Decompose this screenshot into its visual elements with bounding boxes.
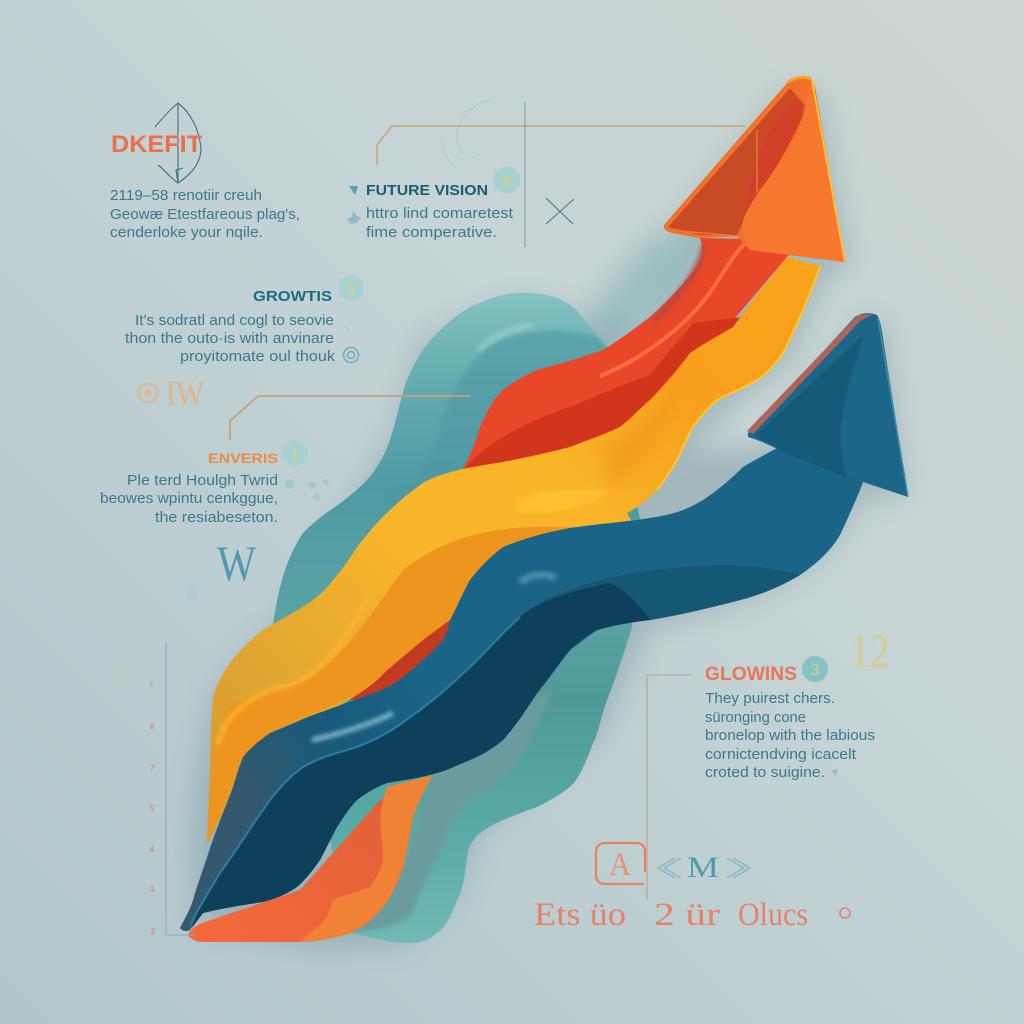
blue ribbon	[180, 448, 863, 931]
yellow ribbon orange lower band	[208, 527, 620, 838]
red sliver	[350, 590, 480, 700]
red ribbon light stripe	[600, 238, 752, 376]
left axis: 5	[150, 804, 155, 813]
left axis: 2	[151, 927, 156, 936]
body text: süronging cone	[705, 710, 806, 726]
body text: croted to suigine.	[705, 765, 825, 781]
yellow ribbon bright stripe	[218, 600, 368, 745]
badge	[282, 440, 308, 466]
label: IW	[138, 374, 204, 413]
blue arrow head	[747, 313, 908, 497]
leader line	[647, 675, 692, 900]
left axis: 1	[118, 671, 124, 681]
icon: leaf outline	[155, 103, 201, 183]
head base	[664, 77, 845, 262]
ribbon arrow illustration	[180, 77, 908, 950]
blue ribbon highlight	[312, 713, 393, 740]
drop shadow	[193, 90, 905, 950]
body text	[366, 206, 513, 241]
teal grey band	[350, 687, 553, 933]
number 12: 12	[850, 625, 890, 678]
left axis	[112, 642, 195, 936]
body text: cenderloke your nqile.	[110, 225, 263, 241]
body text	[110, 188, 300, 241]
footer text: Ets üo	[534, 897, 626, 933]
badge: 6	[503, 173, 511, 190]
block: glowins	[647, 625, 890, 900]
yellow ribbon rim	[657, 266, 820, 490]
label: IW: IW	[166, 374, 204, 413]
blue ribbon stripe	[190, 617, 520, 925]
left axis: 4	[150, 845, 155, 854]
heading: GROWTIS	[253, 288, 332, 305]
body text: It's sodratl and cogl to seovie	[135, 313, 334, 329]
blue ribbon dark lower	[192, 583, 650, 928]
head red blob	[743, 101, 803, 217]
body text: fime comperative.	[366, 225, 497, 241]
head left rim	[667, 85, 790, 236]
head rim	[747, 314, 874, 434]
head fold line	[756, 130, 758, 193]
icon: left chevrons	[658, 858, 681, 878]
orange tail light band	[300, 775, 433, 942]
body text: Geowæ Etestfareous plag's,	[110, 207, 300, 223]
top connector line	[377, 126, 745, 165]
heading: GLOWINS	[705, 664, 797, 685]
body text	[100, 473, 278, 526]
yellow ribbon shade	[600, 390, 680, 490]
left axis: c	[150, 679, 154, 688]
body text: beowes wpintu cenkggue,	[100, 491, 278, 507]
icon: ring	[344, 348, 358, 362]
teal wave	[273, 293, 640, 943]
vertical divider	[524, 102, 526, 247]
badge	[494, 166, 520, 194]
head yellow rim	[812, 80, 845, 262]
body text	[125, 313, 336, 365]
red ribbon shaded rim	[655, 245, 704, 320]
icon: small drop	[832, 770, 838, 776]
icon: M: M	[687, 851, 719, 884]
block: future vision	[347, 100, 574, 247]
icon: cross	[546, 198, 574, 224]
body text: Ple terd Houlgh Twrid	[127, 473, 278, 489]
body text: thon the outo·is with anvinare	[125, 331, 334, 347]
icon: small mark	[343, 322, 351, 330]
body text: 2119–58 renotiir creuh	[110, 188, 262, 204]
teal shadow under red ribbon	[590, 235, 705, 350]
footer text: Olucs	[738, 897, 808, 933]
red ribbon dark lower	[465, 290, 760, 468]
heading: FUTURE VISION	[366, 182, 488, 199]
body text: the resiabeseton.	[155, 510, 278, 526]
body text: httro lind comaretest	[366, 206, 513, 222]
badge	[338, 275, 364, 301]
teal inner shade	[380, 330, 610, 510]
yellow ribbon	[207, 257, 820, 845]
body text	[705, 691, 875, 781]
icon: boxed A	[596, 843, 645, 884]
orange tail	[188, 775, 433, 942]
left axis: 3	[150, 885, 155, 894]
block: title DKEFIT	[110, 103, 300, 241]
connector line to ribbon	[230, 396, 470, 440]
body text: bronelop with the labious	[705, 728, 875, 744]
body text: cornictendving icacelt	[705, 747, 856, 763]
head body	[748, 313, 908, 497]
teal highlight	[478, 325, 533, 350]
icon: small heart	[349, 186, 358, 195]
blue ribbon mid shade	[470, 565, 800, 700]
block: growth	[125, 275, 364, 365]
decorative dots	[285, 479, 329, 501]
head right face	[742, 82, 845, 262]
icon: right chevrons	[727, 858, 750, 878]
yellow ribbon bright ridge	[517, 490, 610, 513]
head left face	[668, 88, 805, 235]
icon: small leaf	[347, 211, 361, 224]
label: W	[175, 535, 257, 602]
body text: proyitomate oul thouk	[180, 349, 336, 365]
heading: ENVERIS	[208, 450, 278, 466]
footer text: 2 ür	[654, 897, 720, 933]
badge: 3	[811, 662, 820, 679]
decorative arcs	[440, 100, 492, 168]
left axis: 8	[150, 722, 155, 731]
heading: DKEFIT	[111, 131, 202, 158]
footer icon row	[596, 843, 750, 884]
badge: 5	[347, 281, 355, 298]
red ribbon	[463, 238, 800, 480]
body text: They puirest chers.	[705, 691, 835, 707]
icon: boxed A: A	[609, 847, 631, 883]
head light edge	[878, 318, 908, 497]
label: W: W	[217, 535, 257, 591]
badge	[802, 656, 828, 682]
orange arrow head	[664, 77, 845, 262]
left axis: 7	[150, 764, 155, 773]
footer text	[534, 897, 850, 933]
badge: 1	[291, 446, 299, 463]
block: inverse	[100, 440, 329, 526]
head inner shade	[755, 335, 863, 478]
